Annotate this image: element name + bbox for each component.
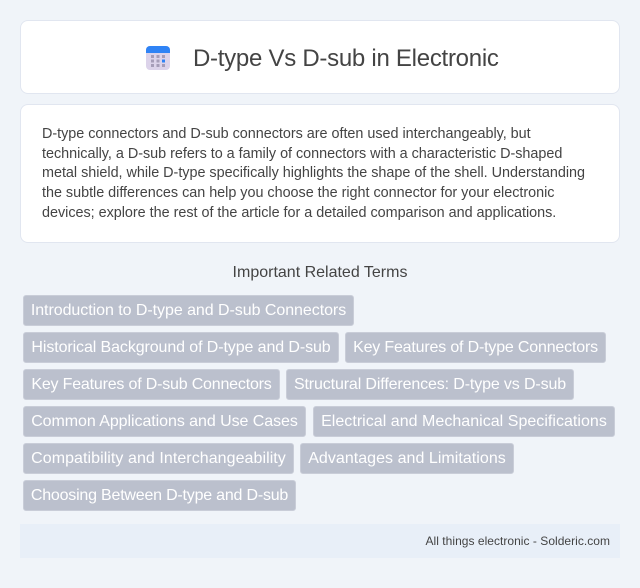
footer (20, 524, 620, 558)
tag: Compatibility and Interchangeability (31, 450, 286, 467)
header card (20, 20, 620, 94)
tag (300, 443, 514, 474)
intro text: metal shield, while D-type specifically highlights the shape of the shell. Understanding (42, 165, 585, 181)
tag: Advantages and Limitations (308, 450, 506, 467)
tag: Electrical and Mechanical Specifications (321, 413, 607, 430)
tag (286, 369, 574, 400)
related terms tags (23, 295, 615, 511)
intro text: technically, a D-sub refers to a family of connectors with a characteristic D-shaped (42, 146, 562, 162)
tag (23, 480, 296, 511)
tag: Historical Background of D-type and D-sub (31, 339, 331, 356)
tag (313, 406, 615, 437)
tag (23, 295, 354, 326)
tag: Common Applications and Use Cases (31, 413, 298, 430)
icon: calendar (146, 46, 170, 70)
tag: Key Features of D-sub Connectors (31, 376, 272, 393)
title: D-type Vs D-sub in Electronic (193, 45, 499, 72)
footer text: All things electronic - Solderic.com (426, 534, 610, 548)
intro text (42, 126, 585, 221)
intro text: the subtle differences can help you choose the right connector for your electronic (42, 185, 554, 201)
tag: Choosing Between D-type and D-sub (31, 487, 288, 504)
tag (23, 406, 306, 437)
tag: Structural Differences: D-type vs D-sub (294, 376, 566, 393)
tag (23, 332, 339, 363)
tag: Introduction to D-type and D-sub Connectors (31, 302, 346, 319)
tag: Key Features of D-type Connectors (353, 339, 598, 356)
tag (23, 369, 280, 400)
related terms heading: Important Related Terms (233, 264, 407, 281)
tag (23, 443, 294, 474)
intro text panel (20, 104, 620, 243)
tag (345, 332, 606, 363)
intro text: devices; explore the rest of the article for a detailed comparison and applications. (42, 205, 556, 221)
intro text: D-type connectors and D-sub connectors are often used interchangeably, but (42, 126, 531, 142)
